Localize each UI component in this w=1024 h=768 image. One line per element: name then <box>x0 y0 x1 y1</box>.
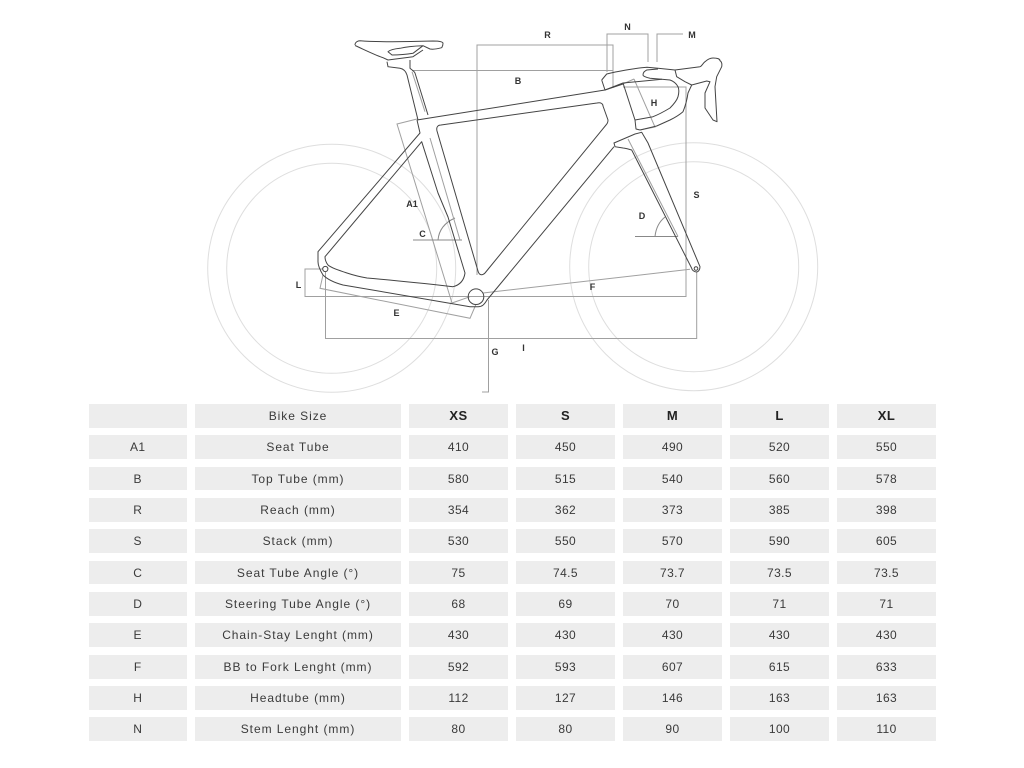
row: N stem length <box>89 717 936 741</box>
row: R reach: 398 <box>876 503 897 517</box>
row: S stack: 605 <box>876 534 897 548</box>
dimension labels: I <box>522 343 525 353</box>
row: A1 seat tube: 450 <box>555 440 576 454</box>
row: A1 seat tube: 550 <box>876 440 897 454</box>
row: C seat tube angle: C <box>133 566 142 580</box>
row: B top tube: B <box>134 472 142 486</box>
row: B top tube <box>89 467 936 490</box>
geometry table <box>89 404 936 741</box>
row: S stack: Stack (mm) <box>263 534 333 548</box>
dimension labels: B <box>515 76 522 86</box>
row: S stack: 530 <box>448 534 469 548</box>
bottom bracket <box>468 289 484 305</box>
dimension labels: S <box>693 190 700 200</box>
row: H headtube: 146 <box>662 691 683 705</box>
row: H headtube: 127 <box>555 691 576 705</box>
frame outer outline <box>318 84 623 307</box>
front axle <box>694 267 698 270</box>
dimension labels: N <box>624 22 631 32</box>
dimension labels: C <box>419 229 426 239</box>
row: bike size header <box>89 404 936 428</box>
dimension labels: E <box>393 308 400 318</box>
row: S stack: 590 <box>769 534 790 548</box>
row: A1 seat tube: 410 <box>448 440 469 454</box>
row: F BB to fork length: 607 <box>662 660 683 674</box>
row: N stem length: 80 <box>451 722 466 736</box>
dimension labels: F <box>590 282 596 292</box>
front wheel <box>570 143 818 391</box>
row: bike size header: L <box>775 408 784 423</box>
row: D steering tube angle <box>89 592 936 616</box>
row: R reach: R <box>133 503 142 517</box>
row: N stem length: N <box>133 722 142 736</box>
dimension labels: G <box>491 347 499 357</box>
row: D steering tube angle: Steering Tube Angle (°) <box>225 597 371 611</box>
row: E chain-stay length: 430 <box>769 628 790 642</box>
row: F BB to fork length: F <box>134 660 142 674</box>
row: F BB to fork length: 615 <box>769 660 790 674</box>
row: H headtube: H <box>133 691 142 705</box>
row: C seat tube angle: 74.5 <box>553 566 578 580</box>
row: N stem length: 90 <box>665 722 680 736</box>
fork <box>614 132 700 272</box>
row: B top tube: 580 <box>448 472 469 486</box>
row: bike size header: XL <box>878 408 895 423</box>
row: C seat tube angle: 73.5 <box>874 566 899 580</box>
row: B top tube: 560 <box>769 472 790 486</box>
row: D steering tube angle: D <box>133 597 142 611</box>
row: F BB to fork length: BB to Fork Lenght (mm) <box>224 660 372 674</box>
row: bike size header: S <box>561 408 570 423</box>
row: A1 seat tube <box>89 435 936 459</box>
row: E chain-stay length: Chain-Stay Lenght (mm) <box>222 628 374 642</box>
row: B top tube: Top Tube (mm) <box>251 472 345 486</box>
row: S stack: 550 <box>555 534 576 548</box>
row: H headtube: 112 <box>448 691 469 705</box>
row: C seat tube angle: Seat Tube Angle (°) <box>237 566 359 580</box>
dimension labels: H <box>651 98 657 108</box>
row: R reach: 373 <box>662 503 683 517</box>
row: D steering tube angle: 71 <box>772 597 787 611</box>
row: E chain-stay length: 430 <box>555 628 576 642</box>
row: D steering tube angle: 69 <box>558 597 573 611</box>
row: S stack <box>89 529 936 553</box>
seat post <box>387 60 428 120</box>
row: N stem length: 80 <box>558 722 573 736</box>
row: bike size header: M <box>667 408 678 423</box>
rear triangle cut-out <box>325 142 465 287</box>
rear axle <box>323 266 328 272</box>
row: N stem length: Stem Lenght (mm) <box>241 722 355 736</box>
row: bike size header: XS <box>449 408 468 423</box>
row: E chain-stay length <box>89 623 936 647</box>
row: A1 seat tube: Seat Tube <box>266 440 330 454</box>
row: H headtube <box>89 686 936 710</box>
row: N stem length: 110 <box>876 722 897 736</box>
row: R reach <box>89 498 936 522</box>
row: S stack: 570 <box>662 534 683 548</box>
main triangle cut-out <box>437 103 608 275</box>
row: E chain-stay length: 430 <box>876 628 897 642</box>
stem <box>602 67 662 90</box>
rear wheel <box>208 144 456 392</box>
row: C seat tube angle <box>89 561 936 584</box>
row: F BB to fork length: 592 <box>448 660 469 674</box>
row: B top tube: 515 <box>555 472 576 486</box>
row: E chain-stay length: 430 <box>662 628 683 642</box>
row: C seat tube angle: 75 <box>451 566 466 580</box>
dimension labels: A1 <box>406 199 418 209</box>
row: D steering tube angle: 68 <box>451 597 466 611</box>
dimension labels: L <box>296 280 302 290</box>
row: N stem length: 100 <box>769 722 790 736</box>
row: B top tube: 540 <box>662 472 683 486</box>
row: R reach: 354 <box>448 503 469 517</box>
row: E chain-stay length: E <box>134 628 142 642</box>
bar inner curve <box>635 69 692 120</box>
row: C seat tube angle: 73.7 <box>660 566 685 580</box>
row: R reach: 385 <box>769 503 790 517</box>
row: H headtube: Headtube (mm) <box>250 691 346 705</box>
dimension labels: R <box>544 30 551 40</box>
dimension labels: M <box>688 30 696 40</box>
row: R reach: 362 <box>555 503 576 517</box>
row: F BB to fork length: 593 <box>555 660 576 674</box>
row: bike size header: Bike Size <box>269 409 327 423</box>
bike geometry diagram <box>207 22 818 393</box>
row: H headtube: 163 <box>769 691 790 705</box>
row: B top tube: 578 <box>876 472 897 486</box>
row: A1 seat tube: 520 <box>769 440 790 454</box>
row: S stack: S <box>134 534 142 548</box>
saddle <box>355 41 443 60</box>
dimension labels <box>296 22 700 357</box>
head tube <box>623 83 640 130</box>
handlebar and stem <box>602 58 722 130</box>
dimension labels: D <box>639 211 646 221</box>
row: D steering tube angle: 70 <box>665 597 680 611</box>
row: H headtube: 163 <box>876 691 897 705</box>
dimension lines <box>305 34 697 392</box>
row: A1 seat tube: A1 <box>130 440 145 454</box>
row: F BB to fork length: 633 <box>876 660 897 674</box>
row: E chain-stay length: 430 <box>448 628 469 642</box>
row: A1 seat tube: 490 <box>662 440 683 454</box>
drop bar <box>640 58 722 130</box>
frame <box>318 84 623 307</box>
row: D steering tube angle: 71 <box>879 597 894 611</box>
row: R reach: Reach (mm) <box>260 503 336 517</box>
row: F BB to fork length <box>89 655 936 679</box>
row: C seat tube angle: 73.5 <box>767 566 792 580</box>
